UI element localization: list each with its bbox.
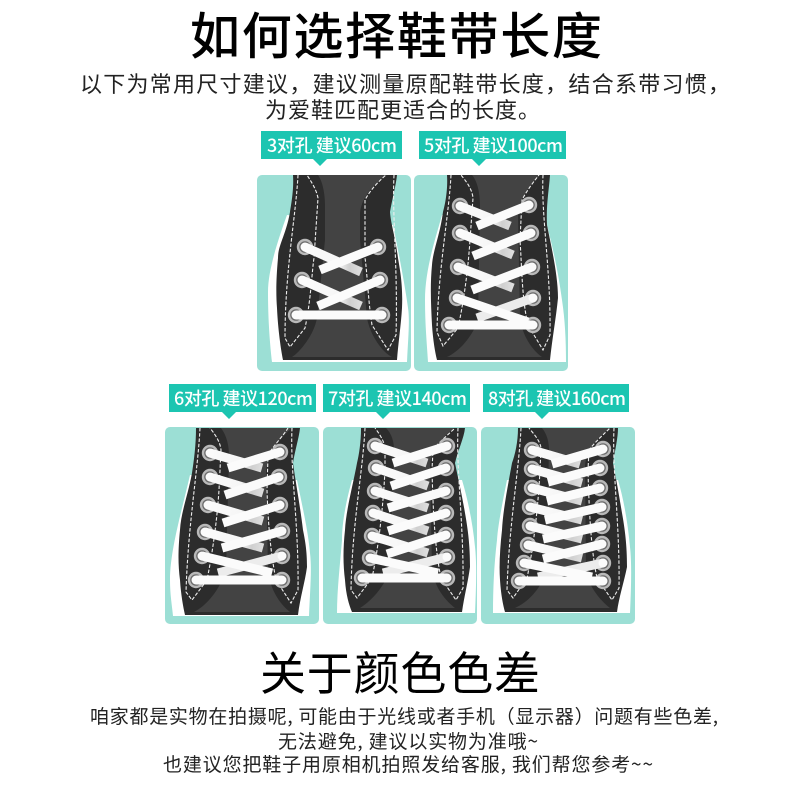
label: 3 pairs <box>261 131 402 166</box>
colour difference note: 也建议您把鞋子用原相机拍照发给客服, 我们帮您参考~~ <box>163 750 653 777</box>
label: 8 pairs: 8对孔 建议160cm <box>488 385 626 411</box>
intro text: 为爱鞋匹配更适合的长度。 <box>265 93 540 125</box>
heading: colour difference: 关于颜色色差 <box>260 638 540 704</box>
label: 7 pairs: 7对孔 建议140cm <box>328 385 467 411</box>
intro text: 以下为常用尺寸建议，建议测量原配鞋带长度，结合系带习惯， <box>80 67 730 99</box>
label: 5 pairs: 5对孔 建议100cm <box>424 132 563 158</box>
panel: 6 pairs, 120cm <box>165 384 319 624</box>
colour difference note <box>90 702 718 777</box>
panel: 3 pairs, 60cm <box>257 131 411 371</box>
label: 3 pairs: 3对孔 建议60cm <box>267 132 397 158</box>
panel: 5 pairs, 100cm <box>414 131 568 371</box>
colour difference note: 咱家都是实物在拍摄呢, 可能由于光线或者手机（显示器）问题有些色差, <box>90 702 718 729</box>
label: 6 pairs: 6对孔 建议120cm <box>174 385 313 411</box>
panel: 7 pairs, 140cm <box>323 384 477 624</box>
colour difference note: 无法避免, 建议以实物为准哦~ <box>278 727 538 754</box>
panel: 8 pairs, 160cm <box>481 384 635 624</box>
intro text <box>80 67 730 125</box>
